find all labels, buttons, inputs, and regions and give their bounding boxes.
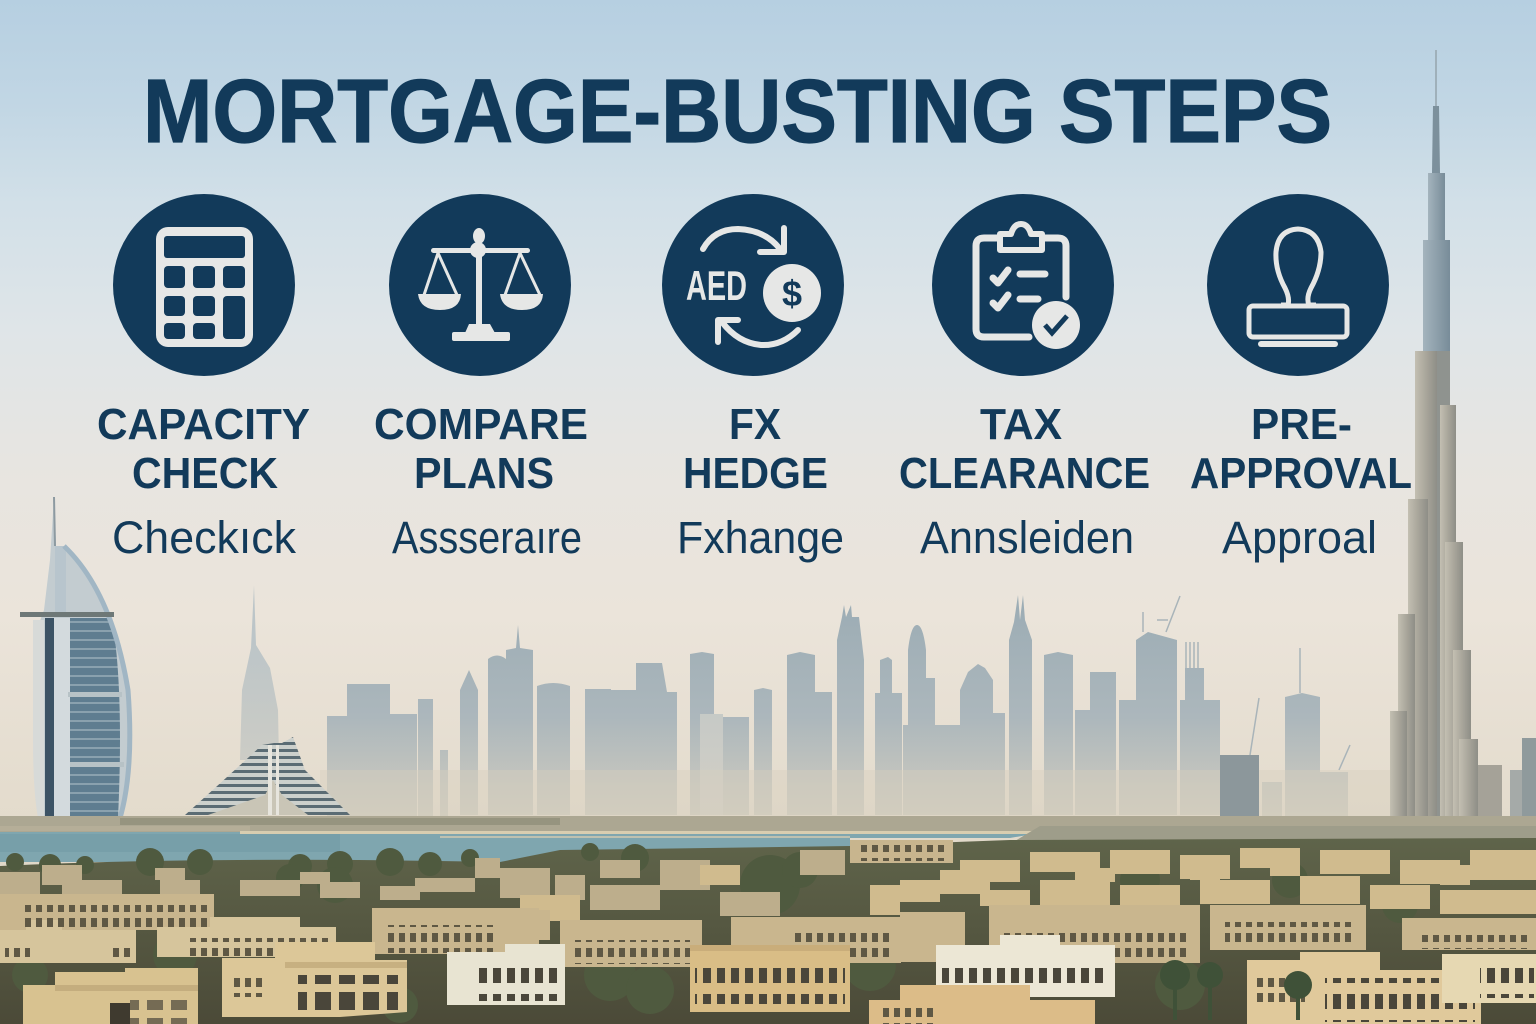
foreground: large villas (23, 840, 1536, 1024)
icon: currency exchange (662, 194, 844, 376)
icon: currency exchange: $ (782, 273, 802, 314)
heading (899, 400, 1150, 498)
icon: clipboard with check (932, 194, 1114, 376)
step 5: pre-approval (1190, 194, 1412, 563)
title: MORTGAGE-BUSTING STEPS (143, 62, 1332, 162)
icon: rubber stamp (1207, 194, 1389, 376)
foreground: distant villas (0, 850, 845, 916)
heading: CHECK (132, 449, 278, 498)
heading: CLEARANCE (899, 449, 1150, 498)
landmark: Jumeirah tower (185, 737, 350, 815)
waterfront: water (0, 826, 1536, 862)
caption: Annsleiden (920, 512, 1134, 563)
foreground: far right villas (520, 848, 1536, 921)
foreground: ground and trees (0, 838, 1536, 1024)
skyline haze overlay (320, 770, 1390, 816)
icon: currency exchange: AED (686, 262, 747, 309)
step 4: tax clearance (899, 194, 1150, 563)
landmark: Burj Al Arab (20, 497, 130, 818)
heading: TAX (980, 400, 1062, 449)
distant skyline (240, 585, 1348, 820)
step 3: FX hedge (662, 194, 844, 563)
heading: FX (729, 400, 781, 449)
icon: balance scale (389, 194, 571, 376)
heading (1190, 400, 1412, 498)
landmark: Burj Khalifa (1220, 50, 1536, 829)
skyline spires and cranes (1143, 596, 1350, 770)
step 2: compare plans (374, 194, 588, 563)
heading (97, 400, 310, 498)
foreground: palm trees (1160, 960, 1312, 1020)
caption: Assseraıre (392, 512, 582, 563)
caption: Fxhange (677, 512, 844, 563)
heading: CAPACITY (97, 400, 310, 449)
heading: HEDGE (683, 449, 828, 498)
caption: Approal (1222, 512, 1377, 563)
caption: Checkıck (112, 512, 296, 563)
heading: COMPARE (374, 400, 588, 449)
step 1: capacity check (97, 194, 310, 563)
foreground: mid villas (0, 894, 1536, 967)
icon: calculator (113, 194, 295, 376)
foreground: mid villa windows (5, 905, 1530, 964)
heading (374, 400, 588, 498)
waterfront: land strip (0, 816, 1536, 834)
heading (683, 400, 828, 498)
heading: PRE- (1251, 400, 1352, 449)
heading: APPROVAL (1190, 449, 1412, 498)
heading: PLANS (414, 449, 554, 498)
